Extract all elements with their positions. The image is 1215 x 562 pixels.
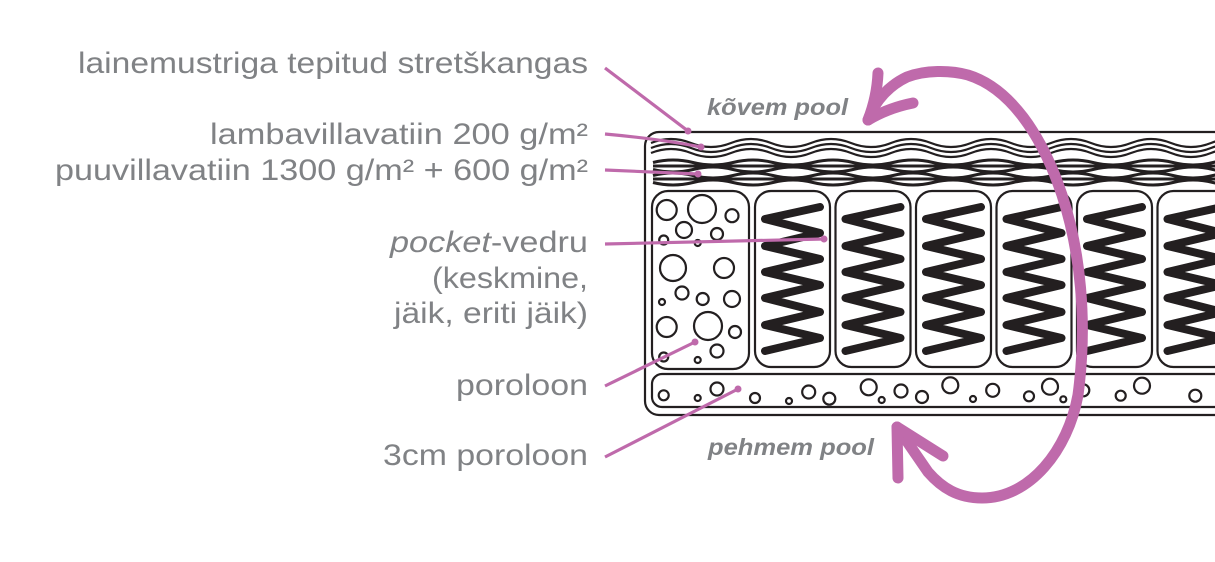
label: firmer side: kõvem pool xyxy=(707,94,849,120)
label: quilted stretch fabric: lainemustriga tepitud stretškangas xyxy=(78,47,588,80)
leader: fabric xyxy=(605,68,692,134)
leader: 3cm foam xyxy=(605,386,742,457)
label: foam: poroloon xyxy=(456,369,588,402)
bottom foam strip xyxy=(652,374,1215,407)
pocket spring 1 xyxy=(755,191,830,367)
woven batting layer xyxy=(653,160,1215,185)
leader: foam xyxy=(605,338,698,386)
label: 3cm foam: 3cm poroloon xyxy=(383,439,588,472)
arrow: flip the mattress xyxy=(868,71,1082,498)
label: pocket spring: pocket -vedru xyxy=(389,226,588,259)
leader: wool xyxy=(605,134,704,150)
label: wool batting: lambavillavatiin 200 g/m² xyxy=(210,118,588,151)
mattress cross-section xyxy=(645,132,1215,415)
pocket spring 5 xyxy=(1077,191,1152,367)
arrowhead: top xyxy=(868,73,913,120)
label: softer side: pehmem pool xyxy=(707,434,875,460)
labels: layer names xyxy=(55,47,588,472)
mattress outline xyxy=(645,132,1215,415)
label: spring firmness line 2: jäik, eriti jäik) xyxy=(393,297,588,330)
pocket spring 2 xyxy=(836,191,910,367)
pocket spring 4 xyxy=(996,191,1072,367)
wavy quilted layer xyxy=(651,139,1215,157)
label: spring firmness line 1: (keskmine, xyxy=(432,262,588,295)
pocket spring 6 xyxy=(1158,191,1215,367)
pocket spring 3 xyxy=(916,191,991,367)
leader: spring xyxy=(605,236,828,244)
arrowhead: bottom xyxy=(897,427,943,478)
leader lines xyxy=(605,68,828,457)
label: cotton batting: puuvillavatiin 1300 g/m² + 600 g/m² xyxy=(55,154,588,187)
foam side block xyxy=(652,191,749,369)
leader: cotton xyxy=(605,170,702,178)
